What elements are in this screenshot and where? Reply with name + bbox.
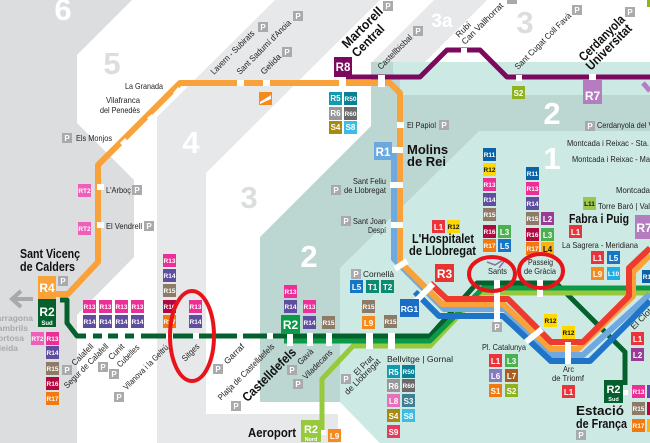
callout: Sants red circle: [469, 257, 515, 291]
service badges: city centre: R12: [545, 318, 557, 325]
station labels: Sant Vicenç: [20, 246, 80, 261]
service badges: west: R14: [132, 319, 144, 326]
station labels: de Llobregat: [409, 243, 477, 258]
parking icons: P: [111, 370, 117, 379]
service badges: city centre: L11: [584, 201, 595, 208]
parking icons: P: [353, 270, 359, 279]
station labels: Cornellà: [363, 269, 394, 279]
rotated station labels: Castellbisbal: [375, 32, 414, 71]
station labels: La Granada: [125, 81, 163, 91]
parking icons: P: [578, 431, 584, 440]
service badges: city centre: L6: [491, 372, 501, 381]
main line badges: Sud: [41, 321, 53, 327]
service badges: west: R15: [47, 366, 59, 373]
main line badges: R2: [39, 305, 55, 319]
parking icons: P: [415, 27, 421, 36]
service badges: west: R14: [164, 273, 176, 280]
service badges: west: R13: [116, 304, 128, 311]
service badges: city centre: L1: [564, 388, 574, 397]
service badges: city centre: [432, 0, 650, 432]
service badges: city centre: L4: [543, 245, 553, 254]
callout: Passeig de Gràcia red circle: [519, 254, 563, 288]
service badges: Martorell and Molins: L5: [352, 283, 362, 292]
parking icons: P: [587, 122, 593, 131]
service badges: city centre: L5: [500, 242, 510, 251]
service badges: city centre: R13: [527, 186, 539, 193]
rotated station labels: Cubelles: [115, 342, 141, 369]
left exit arrow and destinations: [0, 291, 33, 353]
service badges: Martorell and Molins: T1: [368, 283, 378, 292]
service badges: city centre: L9: [593, 270, 603, 279]
station labels: de Rei: [407, 154, 446, 169]
service badges: Martorell and Molins: L9: [364, 319, 374, 328]
parking icons: P: [289, 366, 295, 375]
service badges: city centre: R17: [484, 243, 496, 250]
line: RG1 blue: [415, 292, 650, 361]
parking icons: P: [215, 365, 221, 374]
line: R2 Nord lime: [322, 293, 650, 430]
station labels: de França: [576, 416, 628, 431]
service badges: west: R13: [190, 304, 202, 311]
parking icons: P: [295, 380, 301, 389]
main line badges: R7: [585, 89, 600, 103]
service badges: west: R13: [132, 304, 144, 311]
rotated station labels: Gelida: [258, 51, 283, 76]
main line badges: R8: [336, 62, 351, 74]
service badges: Martorell and Molins: T2: [383, 283, 393, 292]
rotated station labels: Castelldefels: [239, 345, 299, 405]
service badges: city centre: L1: [633, 335, 643, 344]
service badges: city centre: L7: [507, 372, 517, 381]
station labels: Sants: [488, 266, 507, 276]
station labels: Despí: [368, 225, 387, 235]
service badges: west: RT2: [78, 188, 91, 195]
icon: high speed rail at Sants: [487, 260, 505, 268]
rotated station labels: Calafell: [69, 341, 95, 368]
service badges: west: RT2: [31, 336, 44, 343]
line: R2 green: [284, 288, 650, 341]
zone numbers: 3a: [431, 11, 453, 32]
station labels: Pl. Catalunya: [482, 342, 526, 352]
rotated station labels: Martorell: [339, 4, 386, 51]
service badges: west: R15: [323, 320, 335, 327]
zone numbers: 3: [240, 180, 258, 215]
service badges: west: [31, 184, 341, 442]
service badges: city centre: S2: [507, 387, 517, 396]
station labels: Vilafranca: [106, 95, 140, 105]
service badges: city centre: R14: [527, 201, 539, 208]
station labels: Fabra i Puig: [569, 211, 629, 226]
service badges: city centre: R12: [563, 330, 575, 337]
service badges: Martorell and Molins: R15: [363, 304, 375, 311]
rotated station labels: Segur de Calafell: [62, 341, 110, 390]
station labels: Molins: [407, 142, 448, 157]
service badges: west: R15: [164, 288, 176, 295]
parking icons: P: [343, 217, 349, 226]
station labels: L'Arboç: [106, 185, 132, 195]
service badges: Martorell and Molins: R15: [385, 319, 397, 326]
parking icons: P: [343, 375, 349, 384]
station labels: Sant Joan: [353, 216, 386, 226]
service badges: city centre: L1: [571, 228, 581, 237]
parking icons: P: [441, 121, 447, 130]
service badges: city centre: R15: [527, 216, 539, 223]
main line badges: R4: [39, 281, 55, 295]
rotated station labels: Cerdanyola: [576, 11, 628, 64]
station labels: Passeig: [528, 257, 553, 267]
parking icons: P: [233, 402, 239, 411]
parking icons: P: [134, 186, 140, 195]
service badges: Martorell and Molins: R50: [345, 96, 357, 103]
parking icons: P: [494, 323, 500, 332]
service badges: city centre: L10: [608, 271, 619, 278]
parking icons: P: [64, 366, 70, 375]
station labels: de Llobregat: [344, 185, 387, 195]
main line badges: Nord: [305, 437, 317, 443]
service badges: west: R14: [285, 304, 297, 311]
rotated station labels: Garraf: [222, 341, 247, 366]
station labels: Aeroport: [248, 425, 297, 440]
zone numbers: [54, 0, 561, 274]
service badges: city centre: R17: [527, 246, 539, 253]
line: R4 orange: [47, 83, 650, 349]
rotated station labels: Sant Sadurní d'Anoia: [234, 18, 293, 76]
parking icons: P: [116, 393, 122, 402]
service badges: city centre: L1: [491, 357, 501, 366]
service badges: Martorell and Molins: L8: [389, 397, 399, 406]
rotated station labels: Viladecans: [300, 347, 334, 381]
service badges: city centre: L5: [609, 254, 619, 263]
main line badges: R3: [437, 267, 452, 281]
parking icons: P: [260, 23, 266, 32]
service badges: west: R13: [285, 289, 297, 296]
station labels: [20, 81, 650, 440]
zone numbers: 2: [300, 239, 318, 274]
service badges: city centre: S1: [491, 387, 501, 396]
service badges: city centre: L3: [507, 357, 517, 366]
line: R7 branch: [643, 83, 650, 91]
station labels: Sant Feliu: [353, 176, 386, 186]
parking icons: P: [574, 6, 580, 15]
service badges: Martorell and Molins: S4: [331, 123, 341, 132]
line: R3 red: [430, 248, 650, 342]
service badges: west: R17: [47, 396, 59, 403]
service badges: Martorell and Molins: R60: [403, 383, 415, 390]
line: R8 purple: [343, 50, 650, 77]
line: R2 Sud dark green: [60, 283, 625, 385]
main line badges: Sud: [608, 397, 619, 403]
service badges: city centre: L2: [633, 351, 643, 360]
service badges: west: R14: [47, 350, 59, 357]
parking icons: P: [295, 12, 301, 21]
rotated station labels: Sitges: [179, 341, 201, 363]
station labels: Bellvitge | Gornal: [387, 354, 453, 364]
rotated station labels: Vilanova i la Geltrú: [121, 342, 171, 392]
service badges: west: R17: [164, 319, 176, 326]
service badges: city centre: R15: [484, 212, 496, 219]
station ticks: [44, 48, 628, 435]
rotated station labels: Gavà: [295, 346, 316, 367]
station labels: de Gràcia: [524, 266, 556, 276]
service badges: west: R14: [84, 319, 96, 326]
zone numbers: 3: [516, 5, 534, 40]
service badges: city centre: L3: [500, 228, 510, 237]
main line badges: R1: [376, 147, 391, 159]
service badges: Martorell and Molins: [329, 92, 415, 438]
zone numbers: 1: [543, 141, 561, 176]
service badges: city centre: R15: [633, 406, 645, 413]
service badges: west: R13: [47, 336, 59, 343]
zone numbers: 2: [543, 96, 561, 131]
service badges: city centre: R11: [527, 171, 539, 178]
service badges: city centre: L1: [434, 223, 444, 232]
rotated station labels: Universitat: [583, 20, 635, 73]
callout: Sitges red circle: [170, 291, 214, 381]
rotated station labels: Cunit: [106, 341, 127, 362]
rotated station labels: Central: [349, 21, 387, 60]
service badges: Martorell and Molins: S8: [404, 412, 414, 421]
service badges: city centre: R13: [633, 389, 645, 396]
station labels: de Calders: [20, 259, 75, 274]
service badges: city centre: L1: [593, 254, 603, 263]
service badges: west: L9: [330, 432, 340, 441]
service badges: city centre: R13: [484, 182, 496, 189]
parking icons: P: [60, 277, 66, 286]
service badges: west: R16: [47, 381, 59, 388]
rotated station labels: Rubí: [453, 19, 474, 39]
main line badges: RG1: [401, 304, 419, 314]
service badges: Martorell and Molins: R60: [345, 111, 357, 118]
service badges: city centre: R16: [527, 232, 539, 239]
service badges: west: R14: [190, 319, 202, 326]
service badges: city centre: R17: [633, 423, 645, 430]
station labels: El Papiol: [407, 120, 436, 130]
service badges: city centre: R12: [448, 224, 460, 231]
zone numbers: 5: [103, 46, 121, 81]
parking icons: P: [333, 186, 339, 195]
rotated station labels: El Prat: [351, 353, 376, 377]
rotated station labels: Sant Cugat Coll Favà: [512, 10, 573, 71]
service badges: Martorell and Molins: S8: [346, 123, 356, 132]
station labels: de Triomf: [552, 373, 585, 383]
service badges: city centre: S2: [514, 89, 524, 98]
service badges: west: R16: [164, 304, 176, 311]
parking icons: P: [627, 8, 633, 17]
main line badges: R2: [606, 384, 621, 396]
station labels: Els Monjos: [76, 133, 112, 143]
station labels: Estació: [576, 403, 624, 418]
station labels: El Vendrell: [106, 221, 142, 231]
service badges: west: R13: [164, 258, 176, 265]
service badges: city centre: L3: [543, 231, 553, 240]
parking icons: P: [100, 363, 106, 372]
service badges: Martorell and Molins: R50: [403, 369, 415, 376]
icon: funicular: [259, 92, 272, 105]
rotated station labels: de Llobregat: [342, 356, 383, 397]
service badges: city centre: R16: [484, 229, 496, 236]
parking icons: P: [284, 48, 290, 57]
service badges: Martorell and Molins: S3: [404, 397, 414, 406]
parking icons: P: [146, 222, 152, 231]
parking icons: P: [64, 134, 70, 143]
service badges: Martorell and Molins: R6: [388, 382, 399, 391]
service badges: city centre: R14: [484, 197, 496, 204]
service badges: west: R14: [100, 319, 112, 326]
rail lines: [47, 50, 650, 430]
service badges: city centre: L2: [543, 215, 553, 224]
service badges: west: R13: [84, 304, 96, 311]
rotated station labels: Can Vallhorrat: [459, 0, 506, 46]
service badges: west: R13: [304, 304, 316, 311]
service badges: Martorell and Molins: S9: [389, 428, 399, 437]
service badges: west: R14: [304, 320, 316, 327]
service badges: west: R13: [100, 304, 112, 311]
station labels: del Penedès: [100, 105, 140, 115]
service badges: Martorell and Molins: R5: [330, 94, 341, 103]
rotated station labels: Platja de Castelldefels: [216, 341, 276, 402]
main line badges: R2: [304, 424, 318, 436]
service badges: west: RT2: [78, 226, 91, 233]
parking icons: P: [385, 2, 391, 11]
line: R1 light blue: [394, 150, 650, 355]
service badges: west: R14: [116, 319, 128, 326]
service badges: Martorell and Molins: S4: [389, 412, 399, 421]
service badges: city centre: R11: [484, 152, 496, 159]
zone numbers: 4: [182, 125, 200, 160]
station labels: L'Hospitalet: [412, 231, 475, 246]
station labels: Arc: [563, 364, 575, 374]
service badges: Martorell and Molins: R6: [330, 109, 341, 118]
service badges: city centre: R12: [484, 167, 496, 174]
main line badges: R2: [283, 318, 298, 332]
service badges: Martorell and Molins: R5: [388, 368, 399, 377]
rotated station labels: Lavern - Subirats: [208, 28, 256, 76]
station labels: La Sagrera - Meridiana: [562, 240, 638, 250]
